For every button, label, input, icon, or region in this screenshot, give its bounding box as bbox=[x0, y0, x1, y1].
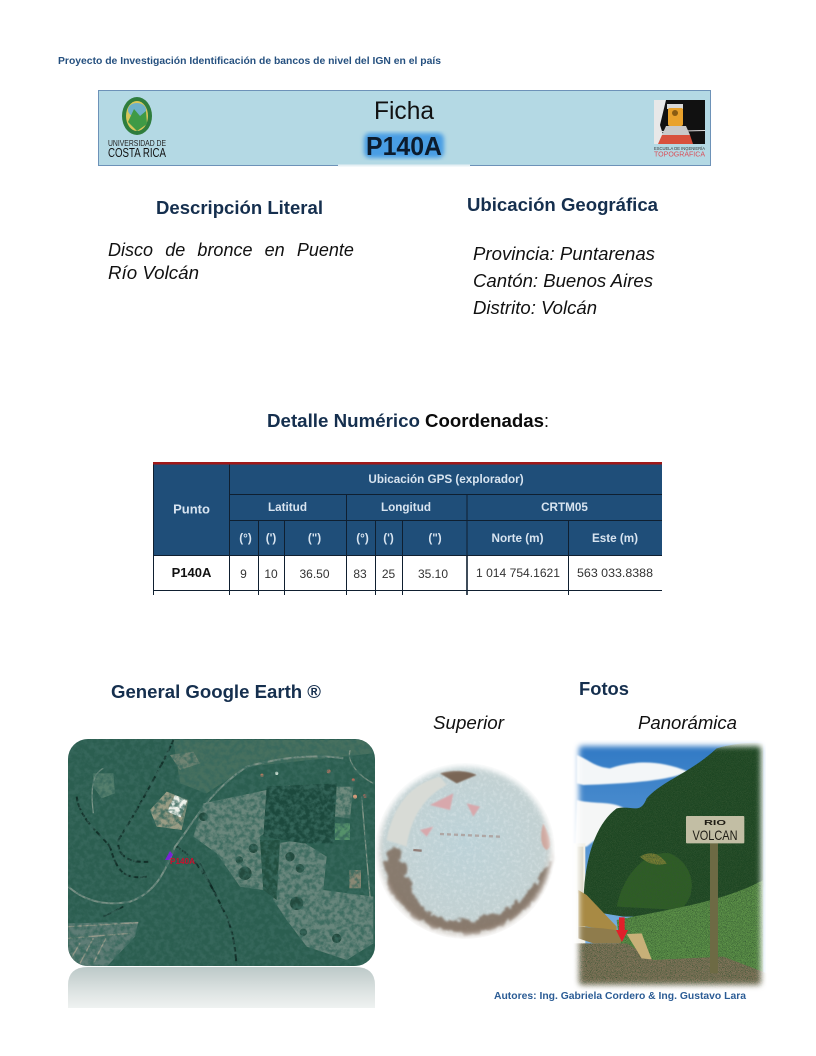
map marker P140A bbox=[165, 851, 195, 864]
table header labels: (°) bbox=[356, 532, 369, 545]
heading: coordinates detail bbox=[267, 411, 549, 431]
table data row: 36.50 bbox=[299, 567, 330, 581]
sign text: VOLCAN bbox=[692, 827, 738, 843]
project heading: Proyecto de Investigación Identificación de bancos de nivel del IGN en el país bbox=[58, 55, 441, 67]
heading: coordinates detail: Detalle Numérico bbox=[267, 411, 420, 431]
table header labels: Norte (m) bbox=[492, 532, 544, 545]
satellite map bbox=[68, 739, 375, 967]
text block: literal description bbox=[108, 240, 354, 283]
table header labels: CRTM05 bbox=[541, 501, 588, 514]
table header labels: Punto bbox=[173, 502, 210, 516]
heading: Fotos: Fotos bbox=[579, 679, 629, 699]
text block: location: Distrito: Volcán bbox=[473, 298, 597, 318]
table data row: 563 033.8388 bbox=[577, 566, 653, 580]
icon: Escuela de Topografía logo bbox=[654, 100, 705, 158]
photo: bronze disc, top view bbox=[375, 762, 555, 940]
icon: Universidad de Costa Rica logo: UNIVERSIDAD DE bbox=[108, 139, 166, 148]
map reflection bbox=[68, 967, 375, 1008]
table header labels: Este (m) bbox=[592, 532, 638, 545]
table header labels: Ubicación GPS (explorador) bbox=[368, 473, 524, 486]
table data row: 10 bbox=[264, 567, 278, 581]
icon: Escuela de Topografía logo: TOPOGRÁFICA bbox=[654, 150, 705, 158]
table header labels: (") bbox=[308, 532, 321, 545]
coordinates table bbox=[153, 462, 662, 595]
icon: Escuela de Topografía logo: ESCUELA DE INGENIERÍA bbox=[654, 145, 705, 151]
table data row: 25 bbox=[382, 567, 395, 581]
sign text bbox=[692, 820, 737, 840]
label: Superior: Superior bbox=[433, 713, 505, 733]
table data row: 1 014 754.1621 bbox=[476, 566, 560, 580]
title: Ficha: Ficha bbox=[374, 97, 434, 125]
text block: location: Provincia: Puntarenas bbox=[473, 244, 655, 264]
text block: literal description: Disco de bronce en Puente bbox=[108, 240, 354, 260]
photo: panoramic view with sign bbox=[570, 740, 767, 993]
text block: location bbox=[473, 244, 655, 318]
heading: General Google Earth: General Google Earth ® bbox=[111, 682, 321, 702]
table header labels: Longitud bbox=[381, 501, 431, 514]
icon: Universidad de Costa Rica logo: COSTA RICA bbox=[108, 145, 166, 160]
map marker P140A: P140A bbox=[170, 857, 195, 866]
authors credit: Autores: Ing. Gabriela Cordero & Ing. Gustavo Lara bbox=[494, 990, 746, 1002]
heading: coordinates detail: Coordenadas bbox=[425, 411, 544, 431]
table data row: 35.10 bbox=[418, 567, 448, 581]
text block: location: Cantón: Buenos Aires bbox=[473, 271, 653, 291]
table data row bbox=[172, 565, 653, 581]
text block: literal description: Río Volcán bbox=[108, 263, 199, 283]
table header labels: (') bbox=[266, 532, 276, 545]
table header labels: (°) bbox=[239, 532, 252, 545]
icon: Universidad de Costa Rica logo bbox=[108, 97, 166, 160]
table header labels: (') bbox=[383, 532, 394, 545]
table data row: P140A bbox=[172, 565, 212, 580]
heading: Descripción Literal: Descripción Literal bbox=[156, 198, 323, 218]
table header labels bbox=[173, 473, 638, 545]
table data row: 9 bbox=[240, 567, 247, 581]
table header labels: (") bbox=[428, 532, 442, 545]
label: Panorámica: Panorámica bbox=[638, 713, 737, 733]
title: P140A with glow: P140A bbox=[366, 131, 442, 161]
sign text: RIO bbox=[704, 820, 727, 827]
heading: coordinates detail: : bbox=[544, 411, 549, 431]
heading: Ubicación Geográfica: Ubicación Geográfica bbox=[467, 195, 659, 215]
header banner bbox=[98, 90, 710, 166]
table header labels: Latitud bbox=[268, 501, 307, 514]
table data row: 83 bbox=[353, 567, 367, 581]
